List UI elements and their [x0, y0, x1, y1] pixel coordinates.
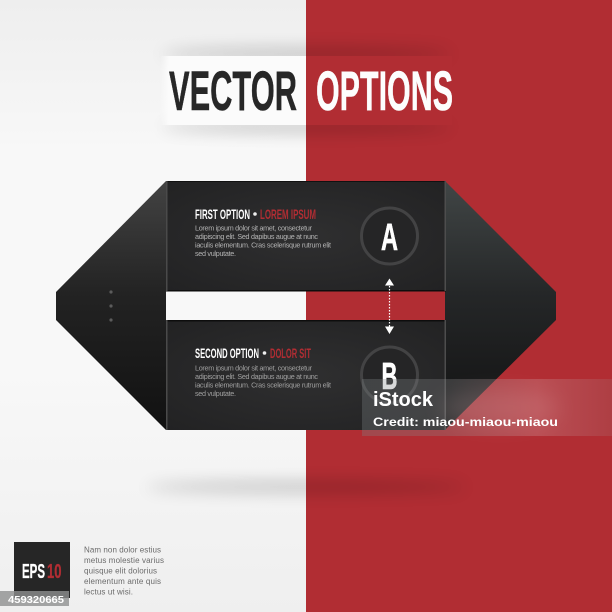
body text: second option: Lorem ipsum dolor sit amet, consectetur	[195, 364, 313, 372]
bottom shadow	[146, 482, 466, 492]
bullet	[253, 212, 257, 216]
heading accent: lorem ipsum: LOREM IPSUM	[260, 206, 316, 222]
right arrow wing	[445, 181, 556, 430]
footnote text: elementum ante quis	[84, 577, 161, 586]
badge: A	[362, 208, 418, 264]
body text: first option: sed vulputate.	[195, 249, 236, 258]
body text: second option: iaculis elementum. Cras scelerisque rutrum elit	[195, 380, 331, 390]
body text: second option	[195, 364, 331, 398]
background: white left half	[0, 0, 307, 612]
watermark credit: Credit: miaou-miaou-miaou	[373, 415, 558, 429]
left arrow wing	[56, 181, 166, 430]
watermark logo: iStock	[373, 388, 434, 411]
heading: second option: SECOND OPTION	[195, 345, 259, 361]
arrow: double-headed dotted connector	[385, 278, 394, 334]
badge: A: A	[381, 217, 398, 259]
panel: first option	[166, 181, 446, 292]
title word: vector: VECTOR	[169, 59, 297, 122]
footnote text: metus molestie varius	[84, 556, 164, 565]
footnote text	[84, 546, 164, 596]
panel: second option	[166, 320, 446, 430]
footnote text: quisque elit dolorius	[84, 566, 157, 576]
badge: EPS10	[14, 542, 70, 598]
title word: options: OPTIONS	[316, 59, 453, 122]
footnote text: lectus ut wisi.	[84, 588, 133, 596]
title band red	[306, 56, 452, 125]
image id strip: 459320665	[8, 594, 64, 606]
title band shadow bottom	[161, 122, 451, 132]
body text: first option: Lorem ipsum dolor sit amet, consectetur	[195, 224, 313, 232]
watermark band	[362, 379, 612, 436]
EPS label: EPS	[22, 561, 45, 583]
body text: first option	[195, 224, 331, 258]
heading accent: dolor sit: DOLOR SIT	[270, 345, 311, 361]
footnote text: Nam non dolor estius	[84, 546, 161, 554]
badge: B: B	[382, 356, 398, 398]
title band white	[160, 56, 306, 125]
title band shadow top	[161, 48, 451, 60]
title	[169, 59, 453, 122]
version number: 10	[47, 561, 62, 583]
wing dots	[109, 290, 113, 322]
heading: first option: FIRST OPTION	[195, 206, 250, 222]
body text: first option: adipiscing elit. Sed dapibus augue at nunc	[195, 232, 318, 241]
body text: second option: adipiscing elit. Sed dapibus augue at nunc	[195, 372, 318, 381]
bullet	[263, 351, 266, 355]
body text: first option: iaculis elementum. Cras scelerisque rutrum elit	[195, 240, 331, 250]
body text: second option: sed vulputate.	[195, 389, 236, 398]
image id strip	[0, 591, 69, 606]
background: red right half	[306, 0, 612, 612]
badge: B	[362, 347, 418, 403]
